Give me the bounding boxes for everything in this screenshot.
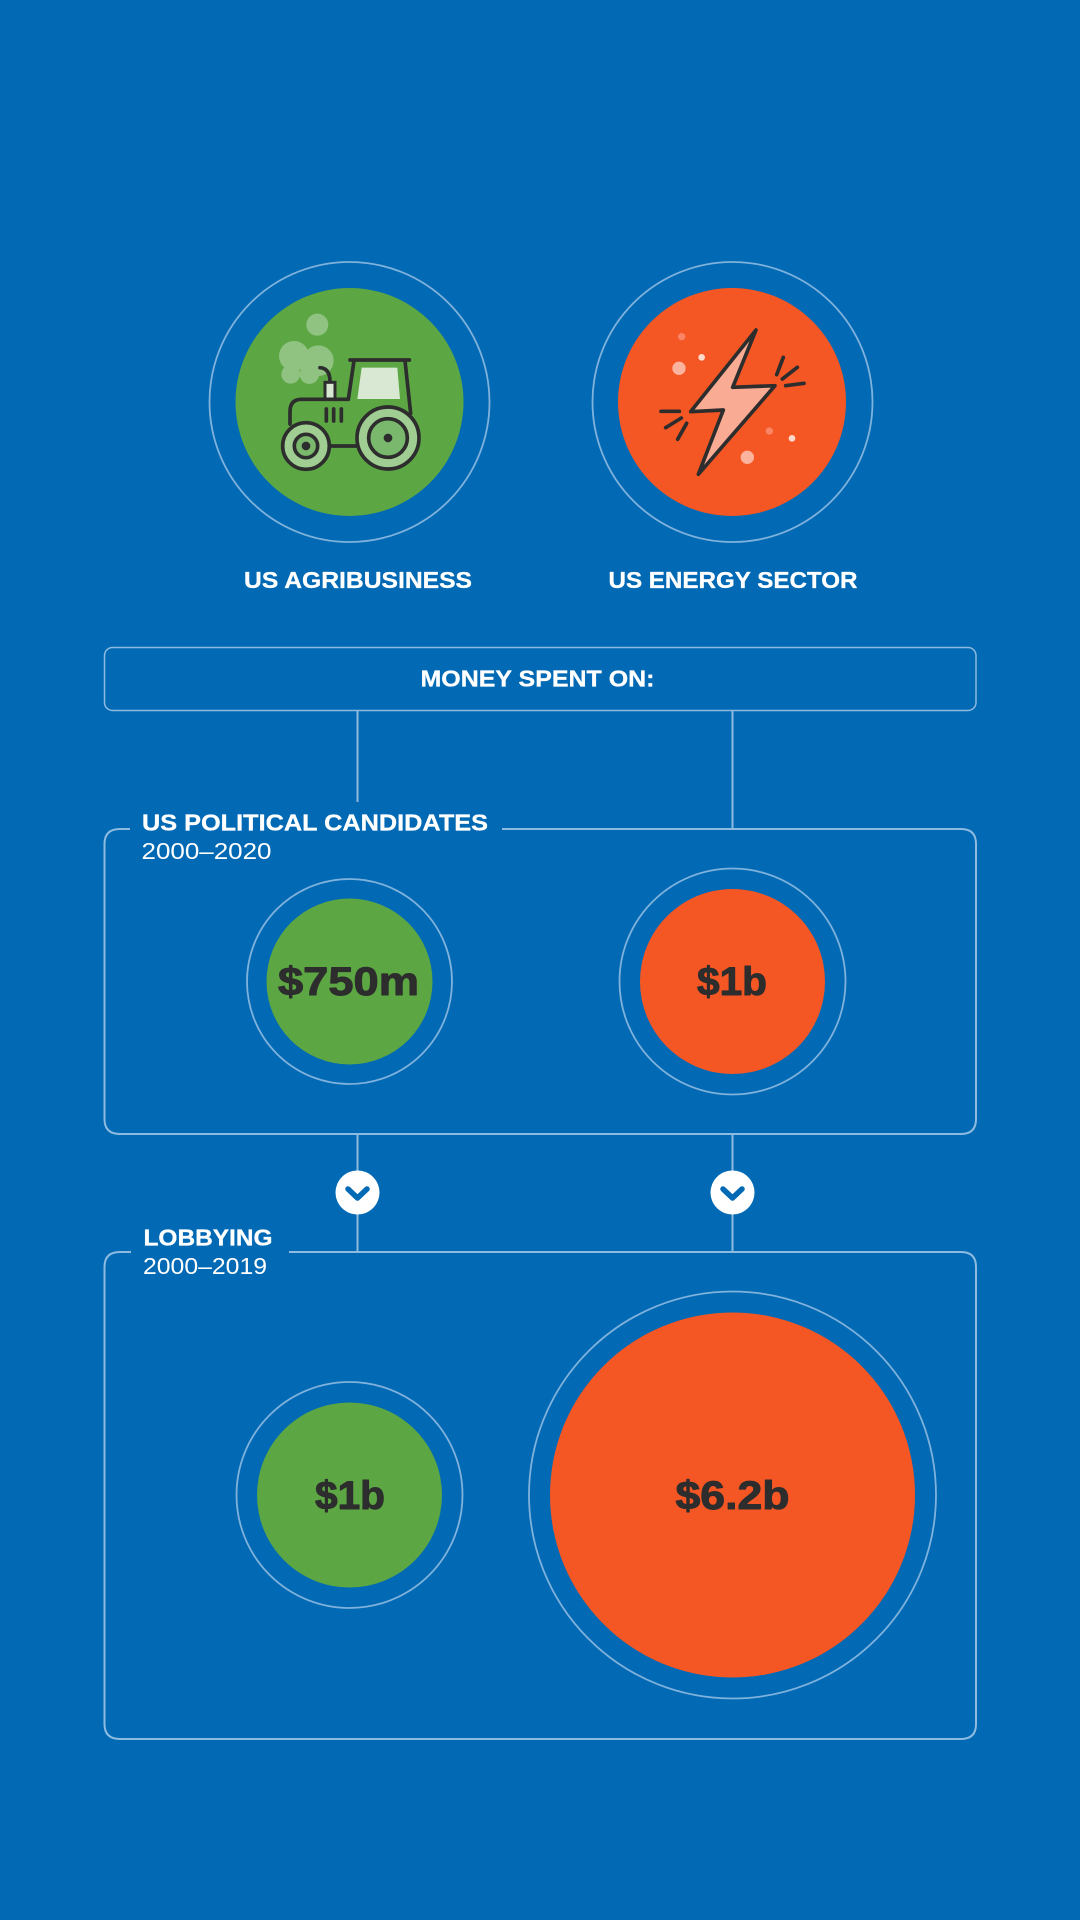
heading: US political candidates: US POLITICAL CANDIDATES <box>142 810 488 836</box>
bubble: agribusiness $750m: $750m <box>278 960 419 1004</box>
icon: tractor <box>279 314 419 469</box>
date range: 2000-2020: 2000–2020 <box>142 838 272 864</box>
connector: money box to panel, right <box>732 710 734 829</box>
connector: panel to lobbying, right <box>732 1134 734 1252</box>
bubble: energy $1b: $1b <box>697 960 767 1004</box>
arrow: left chevron <box>336 1170 380 1214</box>
arrow: right chevron <box>710 1170 754 1214</box>
bubble: agribusiness $1b <box>236 1382 462 1608</box>
connector: panel to lobbying, left <box>356 1134 358 1252</box>
bubble: agribusiness $750m <box>247 879 452 1084</box>
bubble: agribusiness $1b: $1b <box>315 1474 385 1518</box>
date range: 2000-2019: 2000–2019 <box>143 1253 267 1279</box>
panel: lobbying <box>104 1224 976 1739</box>
icon: lightning bolt <box>661 330 804 474</box>
icon: agribusiness tractor badge <box>210 262 490 542</box>
panel: US political candidates <box>104 810 976 1134</box>
label: US agribusiness: US AGRIBUSINESS <box>244 567 472 593</box>
bubble: energy $1b <box>620 868 846 1094</box>
bubble: energy $6.2b: $6.2b <box>676 1474 790 1518</box>
bubble: energy $6.2b <box>529 1292 936 1698</box>
connector: money box to panel, left <box>356 710 358 802</box>
heading: money spent on: MONEY SPENT ON: <box>420 666 654 692</box>
icon: energy lightning badge <box>592 262 872 542</box>
panel: money spent on <box>104 648 976 710</box>
label: US energy sector: US ENERGY SECTOR <box>608 567 858 593</box>
heading: lobbying: LOBBYING <box>144 1224 272 1250</box>
